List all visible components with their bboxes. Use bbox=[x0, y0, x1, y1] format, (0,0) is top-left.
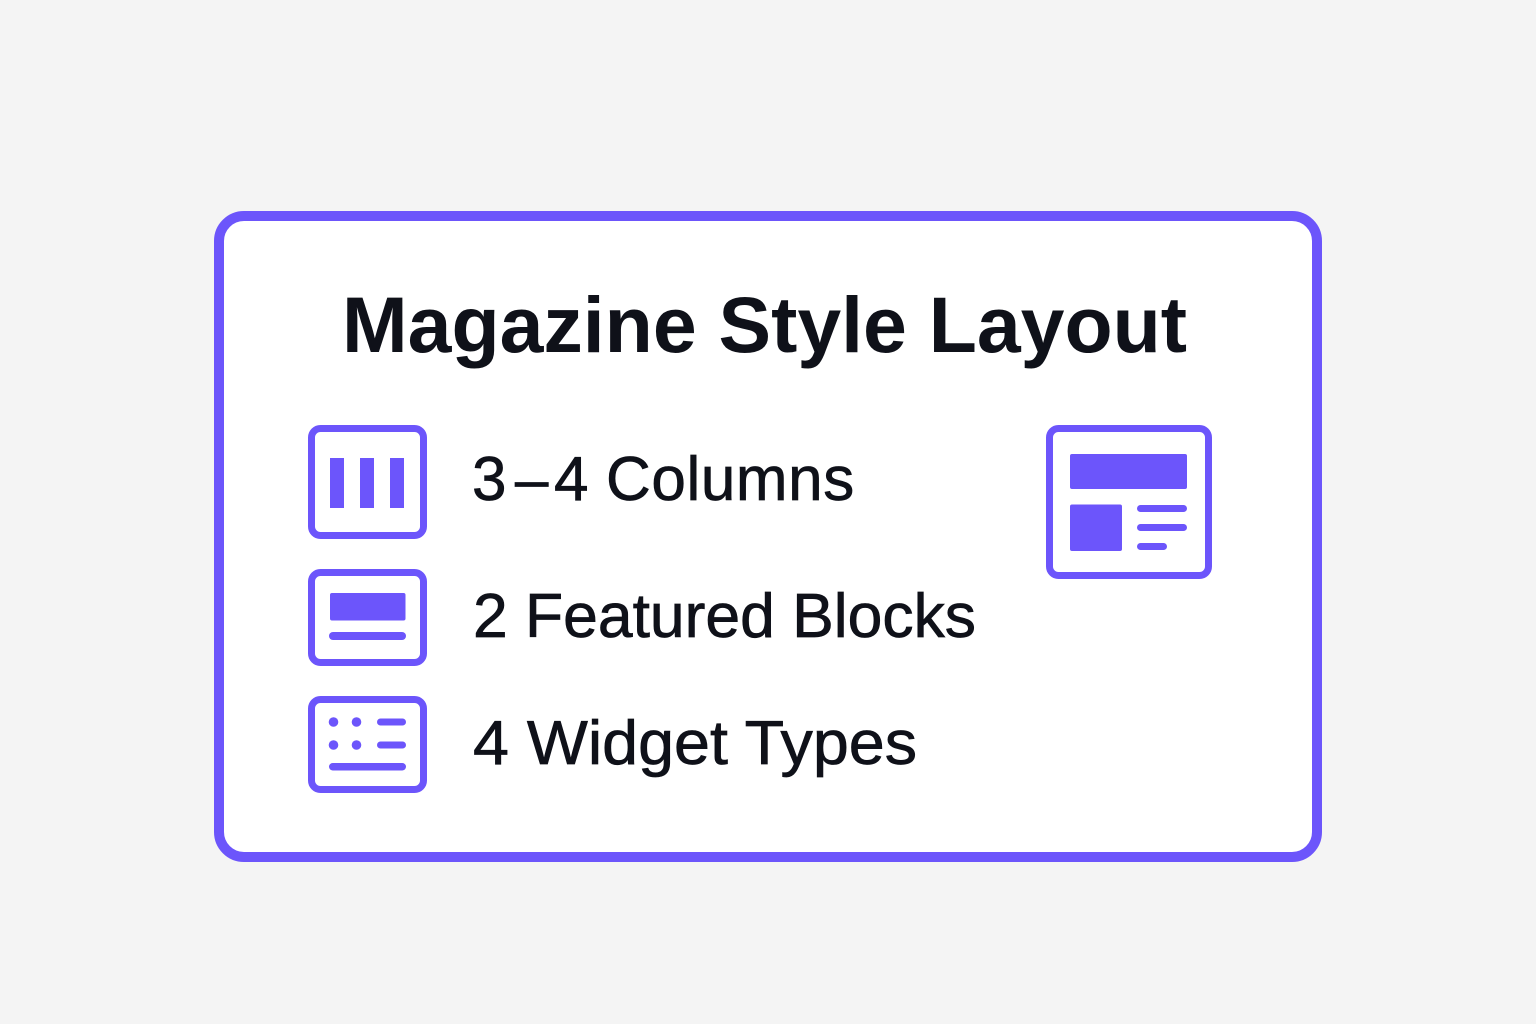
label: columns: 3 bbox=[472, 445, 506, 514]
label: widget types: 4 Widget Types bbox=[473, 709, 917, 778]
label: columns: 4 bbox=[554, 445, 588, 514]
panel: magazine style layout card bbox=[219, 216, 1317, 857]
label: featured blocks: 2 Featured Blocks bbox=[473, 582, 976, 651]
label: columns: Columns bbox=[606, 445, 855, 514]
icon: featured blocks bbox=[312, 572, 424, 662]
icon: magazine layout preview bbox=[1050, 428, 1208, 576]
label: columns: – bbox=[515, 446, 549, 513]
icon: widget types bbox=[312, 700, 424, 790]
title: Magazine Style Layout bbox=[342, 280, 1187, 369]
icon: columns bbox=[312, 428, 424, 536]
